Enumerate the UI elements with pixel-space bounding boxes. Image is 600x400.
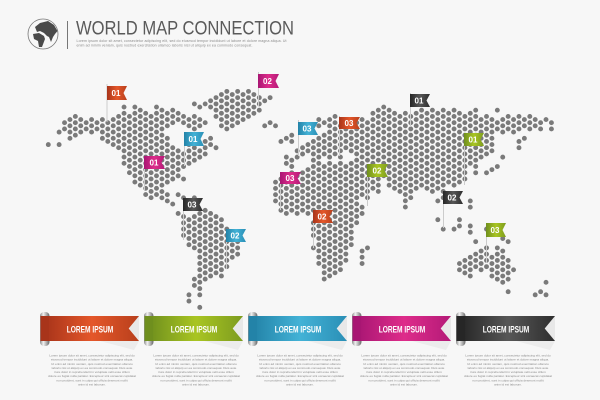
flag: blue 01: 01: [189, 135, 198, 144]
text block: column 1: anim id est laborum.: [78, 382, 106, 386]
text block: column 5: Lorem ipsum dolor sit amet, consectetur adipiscing elit, sed do: [465, 354, 551, 358]
text block: column 1: Ut enim ad minim veniam, quis nostrud exercitation ullamco: [51, 362, 133, 366]
flag: magenta 01: 01: [150, 158, 159, 168]
text block: column 5: [464, 354, 552, 386]
flag: magenta 02: [258, 72, 279, 106]
text block: column 2: irure dolor in reprehenderit in voluptate velit esse cillum: [158, 370, 234, 374]
text block: column 4: Ut enim ad minim veniam, quis nostrud exercitation ullamco: [363, 362, 445, 366]
text block: column 3: Lorem ipsum dolor sit amet, consectetur adipiscing elit, sed do: [257, 354, 343, 358]
panel: green ribbon: [144, 312, 243, 350]
world map of hexagon dots: [48, 91, 551, 308]
text block: column 4: [360, 354, 448, 386]
text block: column 2: dolore eu fugiat nulla pariatur. Excepteur sint occaecat cupidatat: [152, 374, 240, 378]
text block: column 2: [152, 354, 240, 386]
text block: column 2: Ut enim ad minim veniam, quis nostrud exercitation ullamco: [155, 362, 237, 366]
text block: column 5: irure dolor in reprehenderit in voluptate velit esse cillum: [470, 370, 546, 374]
flag: orange 03: [339, 116, 360, 156]
text block: column 1: eiusmod tempor incididunt ut labore et dolore magna aliqua.: [51, 358, 133, 362]
text block: column 1: dolore eu fugiat nulla pariatur. Excepteur sint occaecat cupidatat: [48, 374, 136, 378]
panel: orange ribbon: [40, 312, 139, 350]
text block: column 4: anim id est laborum.: [390, 382, 418, 386]
flag: blue 01: [184, 132, 204, 166]
text block: column 5: laboris nisi ut aliquip ex ea commodo consequat. Duis aute: [468, 366, 549, 370]
text block: column 2: anim id est laborum.: [182, 382, 210, 386]
text block: column 4: Lorem ipsum dolor sit amet, consectetur adipiscing elit, sed do: [361, 354, 447, 358]
text block: column 5: dolore eu fugiat nulla pariatur. Excepteur sint occaecat cupidatat: [464, 374, 552, 378]
flag: green 01: 01: [469, 136, 478, 144]
panel: magenta ribbon: [352, 312, 451, 350]
text block: column 1: non proident, sunt in culpa qui officia deserunt mollit: [56, 378, 128, 382]
flag: blue 03: [298, 120, 318, 156]
icon: globe: [28, 19, 58, 49]
flag: green 03: [486, 223, 506, 263]
flag: black 03: [183, 198, 203, 240]
flag: blue 02: [226, 229, 246, 269]
header: [28, 18, 294, 49]
text block: column 4: laboris nisi ut aliquip ex ea commodo consequat. Duis aute: [364, 366, 445, 370]
text block: column 3: Ut enim ad minim veniam, quis nostrud exercitation ullamco: [259, 362, 341, 366]
text block: column 4: irure dolor in reprehenderit in voluptate velit esse cillum: [366, 370, 442, 374]
flag: magenta 03: [280, 172, 301, 210]
flag: blue 02: 02: [231, 232, 240, 240]
text block: column 3: laboris nisi ut aliquip ex ea commodo consequat. Duis aute: [260, 366, 341, 370]
text block: column 5: Ut enim ad minim veniam, quis nostrud exercitation ullamco: [467, 362, 549, 366]
panel: blue ribbon: LOREM IPSUM: [275, 324, 321, 335]
text block: column 1: irure dolor in reprehenderit in voluptate velit esse cillum: [54, 370, 130, 374]
text block: column 3: anim id est laborum.: [286, 382, 314, 386]
panel: magenta ribbon: LOREM IPSUM: [379, 324, 425, 335]
text block: column 2: Lorem ipsum dolor sit amet, consectetur adipiscing elit, sed do: [153, 354, 239, 358]
panel: black ribbon: [456, 312, 555, 350]
text block: column 2: non proident, sunt in culpa qui officia deserunt mollit: [160, 378, 232, 382]
panel: blue ribbon: [248, 312, 347, 350]
text block: column 3: [256, 354, 344, 386]
flag: orange 03: 03: [345, 119, 354, 128]
flag: blue 03: 03: [303, 124, 312, 134]
text block: column 1: Lorem ipsum dolor sit amet, consectetur adipiscing elit, sed do: [49, 354, 135, 358]
header divider: [67, 21, 68, 49]
panel: orange ribbon: LOREM IPSUM: [67, 324, 113, 335]
title: WORLD MAP CONNECTION: [76, 18, 294, 40]
flag: black 03: 03: [188, 200, 197, 210]
subtitle: enim ad minim veniam, quis nostrud exercitation ullamco laboris nisi ut aliquip ex ea commodo consequat.: [76, 44, 253, 48]
text block: column 2: eiusmod tempor incididunt ut labore et dolore magna aliqua.: [155, 358, 237, 362]
flag: orange 02: 02: [318, 212, 327, 222]
flag: orange 01: 01: [112, 89, 121, 98]
text block: column 5: anim id est laborum.: [494, 382, 522, 386]
flag: green 01: [464, 133, 484, 185]
subtitle: Lorem ipsum dolor sit amet, consectetur adipiscing elit, sed do eiusmod tempor incididunt ut labore et dolore magna aliqua. Ut: [76, 39, 287, 43]
flag: magenta 02: 02: [263, 77, 272, 86]
flag: black 01: [410, 93, 430, 127]
flag: black 02: [443, 191, 463, 228]
text block: column 1: laboris nisi ut aliquip ex ea commodo consequat. Duis aute: [52, 366, 133, 370]
flag: green 02: [367, 164, 388, 206]
text block: column 4: eiusmod tempor incididunt ut labore et dolore magna aliqua.: [363, 358, 445, 362]
text block: column 1: [48, 354, 136, 386]
panel: green ribbon: LOREM IPSUM: [171, 324, 217, 335]
text block: column 3: non proident, sunt in culpa qui officia deserunt mollit: [264, 378, 336, 382]
text block: column 4: dolore eu fugiat nulla pariatur. Excepteur sint occaecat cupidatat: [360, 374, 448, 378]
subtitle: [76, 39, 287, 48]
flag: green 03: 03: [491, 226, 500, 235]
text block: column 2: laboris nisi ut aliquip ex ea commodo consequat. Duis aute: [156, 366, 237, 370]
flag: orange 02: [313, 210, 333, 248]
text block: column 5: non proident, sunt in culpa qui officia deserunt mollit: [472, 378, 544, 382]
text block: column 3: dolore eu fugiat nulla pariatur. Excepteur sint occaecat cupidatat: [256, 374, 344, 378]
flag: black 01: 01: [415, 96, 424, 106]
text block: column 3: eiusmod tempor incididunt ut labore et dolore magna aliqua.: [259, 358, 341, 362]
text block: column 5: eiusmod tempor incididunt ut labore et dolore magna aliqua.: [467, 358, 549, 362]
flag: magenta 03: 03: [286, 174, 295, 183]
flag: orange 01: [106, 84, 127, 122]
text block: column 4: non proident, sunt in culpa qui officia deserunt mollit: [368, 378, 440, 382]
flag: magenta 01: [144, 156, 165, 190]
text block: column 3: irure dolor in reprehenderit in voluptate velit esse cillum: [262, 370, 338, 374]
panel: black ribbon: LOREM IPSUM: [483, 324, 529, 335]
flag: green 02: 02: [373, 166, 382, 176]
flag: black 02: 02: [448, 194, 457, 202]
